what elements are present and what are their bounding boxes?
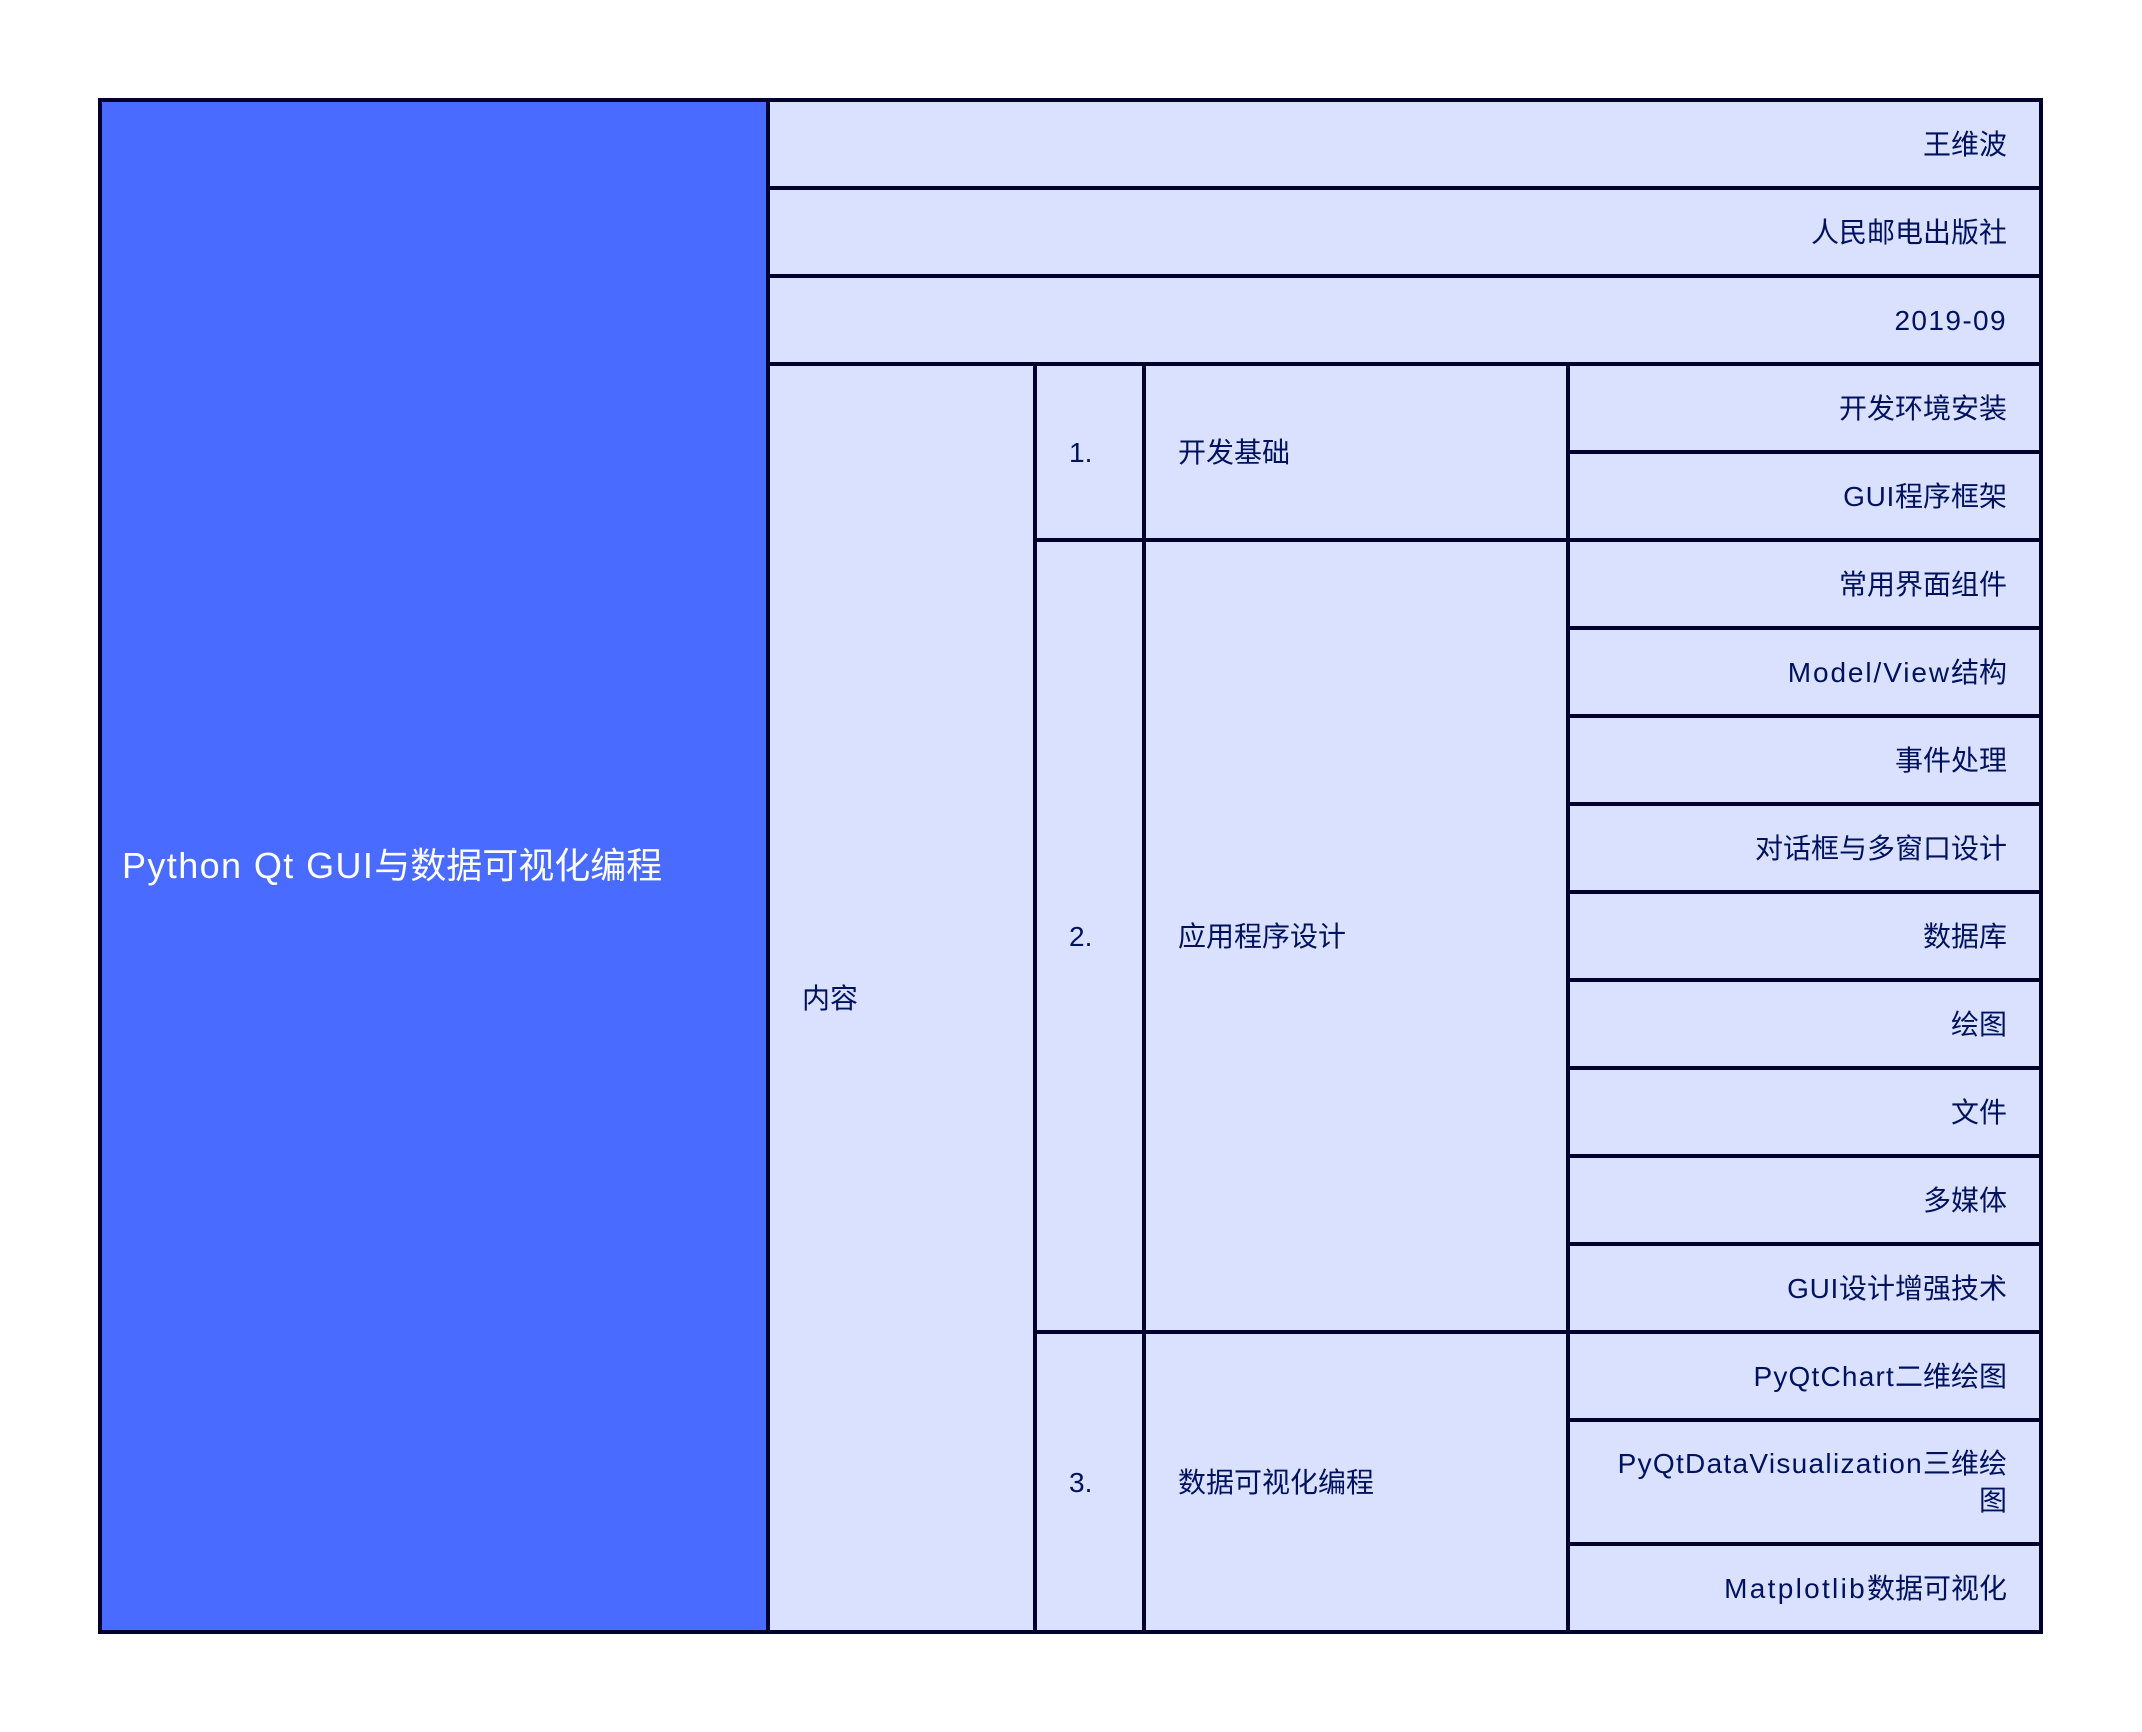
section 3 title — [1142, 1330, 1570, 1634]
section number 2: 2. — [1069, 920, 1092, 952]
section 3 title: 数据可视化编程 — [1178, 1466, 1374, 1498]
publisher — [766, 186, 2043, 278]
chapter: multimedia: 多媒体 — [1923, 1184, 2007, 1216]
author — [766, 98, 2043, 190]
chapter: PyQtDataVisualization: 图 — [1979, 1485, 2007, 1516]
section 1 title: 开发基础 — [1178, 436, 1290, 468]
chapter: model view: Model/View结构 — [1788, 656, 2007, 688]
publisher: 人民邮电出版社 — [1811, 216, 2007, 248]
chapter: events — [1566, 714, 2043, 806]
chapter: database: 数据库 — [1923, 920, 2007, 952]
chapter: GUI framework: GUI程序框架 — [1843, 480, 2007, 512]
chapter: files — [1566, 1066, 2043, 1158]
publication date — [766, 274, 2043, 366]
chapter: PyQtDataVisualization: PyQtDataVisualization三维绘 — [1618, 1448, 2007, 1479]
chapter: drawing — [1566, 978, 2043, 1070]
chapter: PyQtDataVisualization — [1566, 1418, 2043, 1546]
chapter: multimedia — [1566, 1154, 2043, 1246]
chapter: GUI enhancements: GUI设计增强技术 — [1787, 1272, 2007, 1304]
chapter: Matplotlib — [1566, 1542, 2043, 1634]
chapter: model view — [1566, 626, 2043, 718]
section number 3: 3. — [1069, 1466, 1092, 1498]
chapter: dialogs: 对话框与多窗口设计 — [1755, 832, 2007, 864]
chapter: database — [1566, 890, 2043, 982]
content label — [766, 362, 1037, 1634]
publication date: 2019-09 — [1894, 304, 2007, 336]
chapter: GUI framework — [1566, 450, 2043, 542]
section 2 title: 应用程序设计 — [1178, 920, 1346, 952]
chapter: common widgets: 常用界面组件 — [1839, 568, 2007, 600]
content label: 内容 — [802, 982, 858, 1014]
section number 3 — [1033, 1330, 1146, 1634]
section number 1: 1. — [1069, 436, 1092, 468]
chapter: dialogs — [1566, 802, 2043, 894]
author: 王维波 — [1923, 128, 2007, 160]
panel: book title: Python Qt GUI与数据可视化编程 — [122, 845, 662, 886]
chapter: PyQtChart — [1566, 1330, 2043, 1422]
chapter: common widgets — [1566, 538, 2043, 630]
section 1 title — [1142, 362, 1570, 542]
chapter: drawing: 绘图 — [1951, 1008, 2007, 1040]
chapter: events: 事件处理 — [1895, 744, 2007, 776]
chapter: files: 文件 — [1951, 1096, 2007, 1128]
section 2 title — [1142, 538, 1570, 1334]
section number 2 — [1033, 538, 1146, 1334]
panel: book title — [98, 98, 770, 1634]
chapter: Matplotlib: Matplotlib数据可视化 — [1724, 1572, 2007, 1604]
chapter: GUI enhancements — [1566, 1242, 2043, 1334]
chapter: PyQtChart: PyQtChart二维绘图 — [1753, 1360, 2007, 1392]
chapter: dev environment — [1566, 362, 2043, 454]
chapter: dev environment: 开发环境安装 — [1839, 392, 2007, 424]
section number 1 — [1033, 362, 1146, 542]
